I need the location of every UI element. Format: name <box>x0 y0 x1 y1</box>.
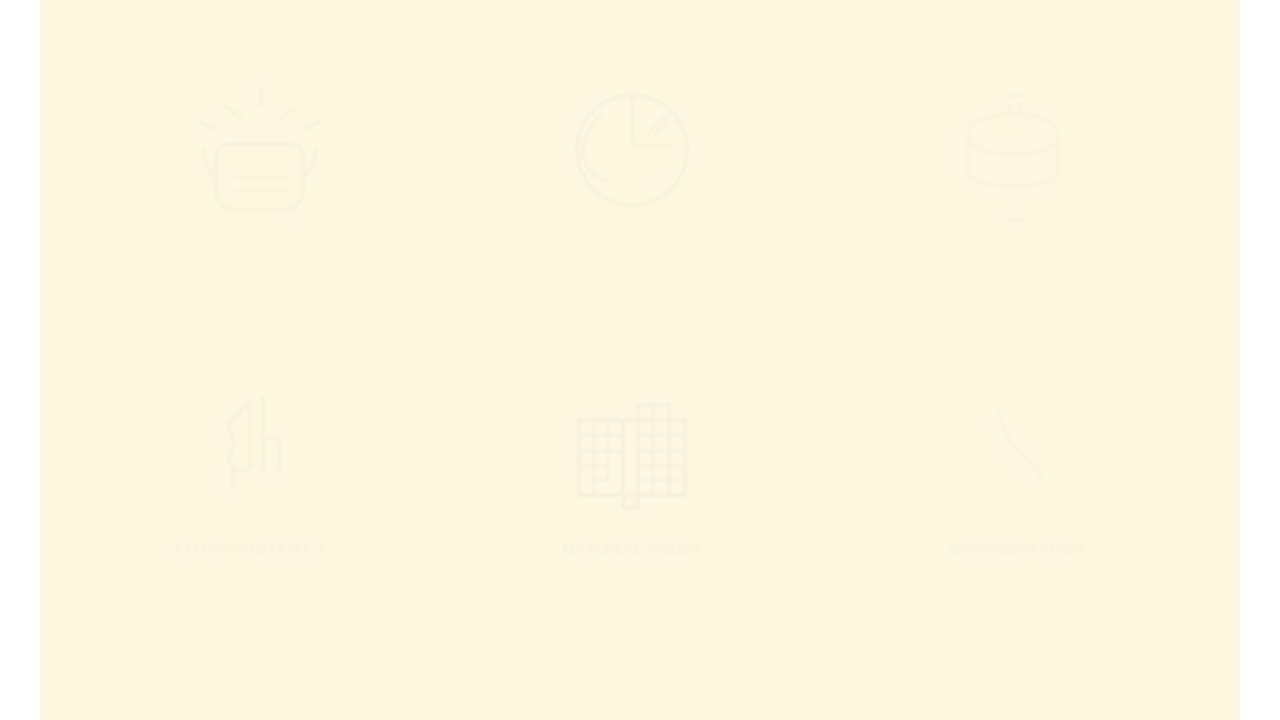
label: ornamentation: ORNAMENTATION <box>950 541 1084 558</box>
label: antipsychant: ANTIPSYCHANT 1 <box>172 541 326 558</box>
icon: curved line <box>999 410 1044 482</box>
icon: woven fiber grid <box>579 405 685 508</box>
icon: lidded pot <box>968 96 1058 219</box>
icon: plant fronds <box>228 397 279 486</box>
icon: pie chart clock <box>577 95 687 205</box>
icon: face mask with radiating lines <box>200 88 320 210</box>
label: natural fiber: NATURAL FIBER <box>562 541 701 558</box>
